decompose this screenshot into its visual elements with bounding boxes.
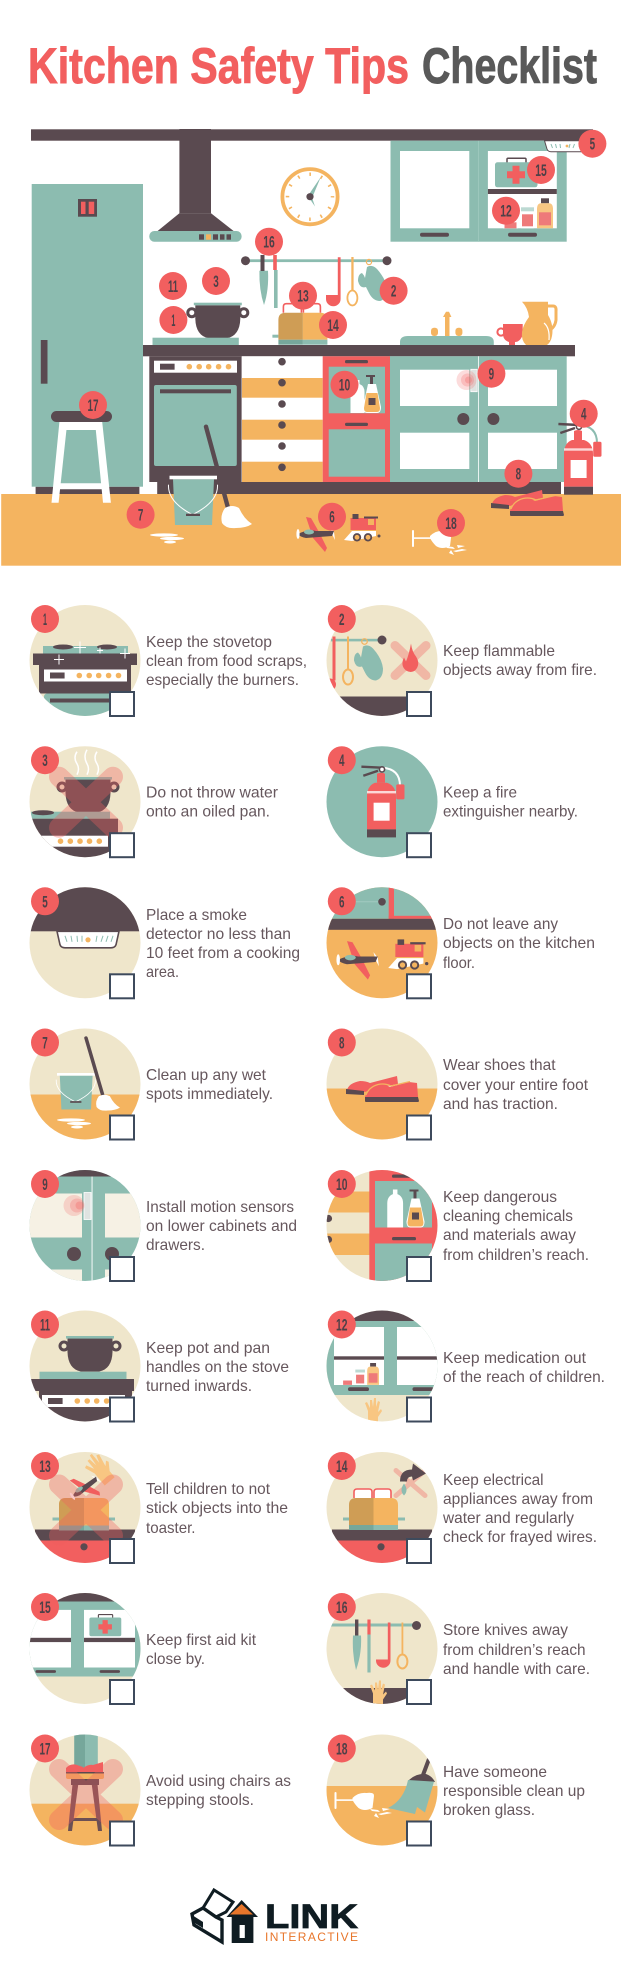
checkbox xyxy=(110,1539,134,1563)
tip text xyxy=(443,1057,589,1113)
tip text xyxy=(146,1481,288,1537)
tip 9 xyxy=(29,1170,297,1282)
number badge xyxy=(328,1734,356,1762)
number badge: 16 xyxy=(336,1599,348,1617)
tip text: floor. xyxy=(443,955,475,972)
logo wordmark: LINK xyxy=(265,1898,359,1936)
tip text: cover your entire foot xyxy=(443,1077,589,1094)
kitchen illustration xyxy=(1,129,621,566)
number badge xyxy=(31,746,59,774)
lower cabinets xyxy=(390,356,567,482)
illustration: toaster with toy xyxy=(29,1449,141,1564)
tip text: stepping stools. xyxy=(146,1792,254,1809)
checkbox xyxy=(407,1680,431,1704)
number badge xyxy=(328,1310,356,1338)
kitchen number badges: 18 xyxy=(445,515,457,533)
number badge: 4 xyxy=(339,752,345,770)
tip text: and has traction. xyxy=(443,1096,558,1113)
number badge xyxy=(328,1452,356,1480)
tip text: Keep electrical xyxy=(443,1472,544,1489)
tip text: check for frayed wires. xyxy=(443,1529,597,1546)
checkbox xyxy=(110,692,134,716)
kitchen number badges: 6 xyxy=(329,509,335,527)
tip 16 xyxy=(326,1592,590,1706)
logo tagline: INTERACTIVE xyxy=(265,1930,358,1944)
kitchen number badges: 9 xyxy=(489,366,494,384)
tip text: close by. xyxy=(146,1651,205,1668)
tip text: turned inwards. xyxy=(146,1378,252,1395)
kitchen number badges: 5 xyxy=(590,136,595,154)
number badge: 3 xyxy=(42,752,48,770)
kitchen number badges: 17 xyxy=(88,397,98,415)
illustration: toys on floor xyxy=(326,887,439,999)
kitchen number badges xyxy=(79,130,606,537)
tip text: Install motion sensors xyxy=(146,1199,294,1216)
title: Kitchen Safety Tips xyxy=(28,38,409,94)
tip text: from children’s reach. xyxy=(443,1247,589,1264)
pot on stove xyxy=(188,303,248,338)
counter top xyxy=(143,345,575,356)
tip text xyxy=(146,907,300,981)
number badge xyxy=(31,605,59,633)
tip 8 xyxy=(326,1028,589,1140)
toy plane xyxy=(296,517,335,552)
illustration: motion sensor xyxy=(29,1170,141,1282)
tip text: Store knives away xyxy=(443,1622,568,1639)
illustration: pot handles xyxy=(29,1310,141,1422)
illustration: fire extinguisher xyxy=(326,746,438,858)
first aid kit xyxy=(495,158,538,187)
tip text xyxy=(443,1350,605,1386)
tip text xyxy=(146,634,307,689)
number badge xyxy=(328,1028,356,1056)
kitchen number badges: 15 xyxy=(535,162,547,180)
bucket xyxy=(168,476,218,525)
number badge xyxy=(328,1170,356,1198)
tip text xyxy=(146,785,279,821)
tip 2 xyxy=(324,604,597,716)
tip text: Keep dangerous xyxy=(443,1189,557,1206)
broken glass xyxy=(412,530,467,555)
number badge xyxy=(328,1593,356,1621)
tip 7 xyxy=(29,1028,273,1140)
tip text: Avoid using chairs as xyxy=(146,1773,291,1790)
red cabinet with chemicals xyxy=(323,356,390,482)
illustration: cleaning chemicals xyxy=(325,1170,438,1284)
checkbox xyxy=(110,974,134,998)
tip text: Keep medication out xyxy=(443,1350,587,1367)
illustration: toaster and water xyxy=(326,1452,438,1564)
checkbox xyxy=(110,1257,134,1281)
checkbox xyxy=(407,1539,431,1563)
number badge: 8 xyxy=(339,1034,345,1052)
cooktop xyxy=(152,338,239,345)
number badge xyxy=(31,1310,59,1338)
checkbox xyxy=(110,1116,134,1140)
tip text: especially the burners. xyxy=(146,672,299,689)
tip text: stick objects into the xyxy=(146,1500,288,1517)
illustration: mop and bucket xyxy=(29,1028,141,1140)
pitcher xyxy=(522,302,556,345)
tip text: area. xyxy=(146,964,179,981)
number badge xyxy=(31,1028,59,1056)
illustration: stepping on stool xyxy=(29,1734,141,1847)
number badge: 13 xyxy=(39,1458,51,1476)
smoke detector xyxy=(544,141,582,152)
utensil rail xyxy=(241,255,392,308)
number badge xyxy=(31,1593,59,1621)
tip text: on lower cabinets and xyxy=(146,1218,297,1235)
kitchen number badges: 8 xyxy=(516,466,521,484)
tip text xyxy=(443,643,597,679)
checkbox xyxy=(407,1257,431,1281)
number badge: 5 xyxy=(42,893,48,911)
checkbox xyxy=(110,1822,134,1846)
tip text: detector no less than xyxy=(146,926,291,943)
number badge: 10 xyxy=(336,1176,348,1194)
logo icon xyxy=(192,1890,258,1943)
tip text: responsible clean up xyxy=(443,1783,585,1800)
illustration: knives on rail xyxy=(326,1592,438,1706)
illustration: first aid kit xyxy=(29,1592,141,1704)
fire extinguisher xyxy=(558,424,602,495)
tip text: Keep the stovetop xyxy=(146,634,272,651)
stool xyxy=(51,411,112,503)
tip 1 xyxy=(29,604,307,716)
kitchen number badges: 2 xyxy=(391,283,396,301)
tip text: Keep pot and pan xyxy=(146,1340,270,1357)
number badge: 18 xyxy=(336,1740,348,1758)
number badge: 11 xyxy=(40,1316,50,1334)
kitchen number badges: 13 xyxy=(297,288,309,306)
tip text: broken glass. xyxy=(443,1802,535,1819)
medicine jars xyxy=(503,198,553,228)
tip text xyxy=(146,1632,257,1668)
kitchen number badges: 7 xyxy=(138,507,143,525)
tip text: toaster. xyxy=(146,1520,196,1537)
fridge xyxy=(32,184,143,494)
tip 10 xyxy=(325,1170,589,1284)
tip text: and handle with care. xyxy=(443,1661,590,1678)
tip 13 xyxy=(29,1449,288,1564)
drawers xyxy=(242,356,323,482)
tip text xyxy=(443,1189,589,1264)
checkbox xyxy=(407,974,431,998)
number badge xyxy=(31,1452,59,1480)
tip text: objects on the kitchen xyxy=(443,935,595,952)
shoes xyxy=(491,490,564,516)
kitchen number badges: 1 xyxy=(171,312,175,330)
illustration: shoes xyxy=(326,1028,438,1140)
number badge: 9 xyxy=(42,1176,48,1194)
number badge: 17 xyxy=(40,1740,50,1758)
floor xyxy=(1,494,621,566)
checkbox xyxy=(407,1822,431,1846)
tip text: spots immediately. xyxy=(146,1086,273,1103)
tip 17 xyxy=(29,1734,291,1847)
number badge: 6 xyxy=(339,893,345,911)
tip 5 xyxy=(29,887,300,999)
tip text: water and regularly xyxy=(442,1510,574,1527)
checkbox xyxy=(407,833,431,857)
number badge: 12 xyxy=(336,1316,348,1334)
tip text: Keep flammable xyxy=(443,643,555,660)
tip text: clean from food scraps, xyxy=(146,653,307,670)
tip text xyxy=(146,1340,289,1395)
toy train xyxy=(344,514,380,541)
illustration: medication cabinet xyxy=(326,1310,438,1423)
tip text: onto an oiled pan. xyxy=(146,804,270,821)
tip 12 xyxy=(326,1310,605,1423)
mop xyxy=(206,427,252,528)
tip text: Place a smoke xyxy=(146,907,247,924)
tip text: Have someone xyxy=(443,1764,547,1781)
tip text xyxy=(146,1773,291,1809)
tip text: 10 feet from a cooking xyxy=(146,945,300,962)
kitchen number badges: 4 xyxy=(581,406,587,424)
tip text: and materials away xyxy=(443,1227,576,1244)
number badge: 2 xyxy=(339,611,345,629)
tip 11 xyxy=(29,1310,289,1422)
motion sensor xyxy=(456,369,477,392)
tip text: Do not leave any xyxy=(443,916,558,933)
logo: Link Interactive xyxy=(192,1890,359,1944)
number badge xyxy=(328,746,356,774)
tip text: extinguisher nearby. xyxy=(443,804,578,821)
checkbox xyxy=(407,1398,431,1422)
tip text: objects away from fire. xyxy=(443,662,597,679)
kitchen number badges: 3 xyxy=(213,273,219,291)
checkbox xyxy=(110,833,134,857)
tip text: Wear shoes that xyxy=(443,1057,556,1074)
upper cabinet xyxy=(390,141,567,242)
plinth xyxy=(157,482,561,494)
checkbox xyxy=(407,692,431,716)
tip text xyxy=(443,916,595,972)
tip text xyxy=(443,1622,590,1678)
number badge xyxy=(328,605,356,633)
tip text: Clean up any wet xyxy=(146,1067,267,1084)
number badge: 1 xyxy=(43,611,47,629)
tip text: handles on the stove xyxy=(146,1359,289,1376)
tip text xyxy=(442,1472,597,1546)
tip text: drawers. xyxy=(146,1237,205,1254)
checkbox xyxy=(407,1116,431,1140)
tip text xyxy=(146,1199,297,1254)
kitchen number badges: 14 xyxy=(327,317,339,335)
tip text xyxy=(443,785,578,821)
illustration: smoke detector xyxy=(29,887,141,999)
illustration: flammable objects xyxy=(324,604,438,716)
tip 18 xyxy=(326,1734,585,1846)
tip text: Keep first aid kit xyxy=(146,1632,257,1649)
number badge xyxy=(31,1170,59,1198)
checkbox xyxy=(110,1398,134,1422)
kitchen number badges: 10 xyxy=(339,377,350,395)
kitchen number badges: 12 xyxy=(500,203,512,221)
tip 6 xyxy=(326,887,595,999)
number badge xyxy=(31,887,59,915)
tip text: Keep a fire xyxy=(443,785,517,802)
tip text: from children’s reach xyxy=(443,1642,586,1659)
sink and faucet xyxy=(400,312,494,345)
number badge: 14 xyxy=(336,1458,348,1476)
tip 4 xyxy=(326,746,578,858)
number badge xyxy=(31,1734,59,1762)
tip 15 xyxy=(29,1592,257,1704)
range hood xyxy=(149,129,242,242)
checkbox xyxy=(110,1680,134,1704)
tip text xyxy=(443,1764,585,1819)
tip text: cleaning chemicals xyxy=(443,1208,573,1225)
tip text: Do not throw water xyxy=(146,785,279,802)
tip text: of the reach of children. xyxy=(443,1369,605,1386)
wall shelf xyxy=(31,129,593,141)
clock xyxy=(282,169,338,224)
illustration: oiled pan xyxy=(29,746,141,858)
tip 3 xyxy=(29,746,279,858)
tip 14 xyxy=(326,1452,597,1564)
tip text: Tell children to not xyxy=(146,1481,271,1498)
tip text: appliances away from xyxy=(443,1491,593,1508)
toaster xyxy=(272,304,327,345)
kitchen number badges: 11 xyxy=(168,278,178,296)
number badge: 15 xyxy=(39,1599,51,1617)
illustration: broom and broken glass xyxy=(326,1734,438,1846)
oven xyxy=(149,356,242,482)
tip text xyxy=(146,1067,273,1103)
number badge: 7 xyxy=(42,1034,48,1052)
kitchen number badges: 16 xyxy=(263,234,275,252)
number badge xyxy=(328,887,356,915)
cup xyxy=(497,324,523,345)
water spill xyxy=(150,533,184,544)
illustration: stovetop xyxy=(29,604,144,716)
